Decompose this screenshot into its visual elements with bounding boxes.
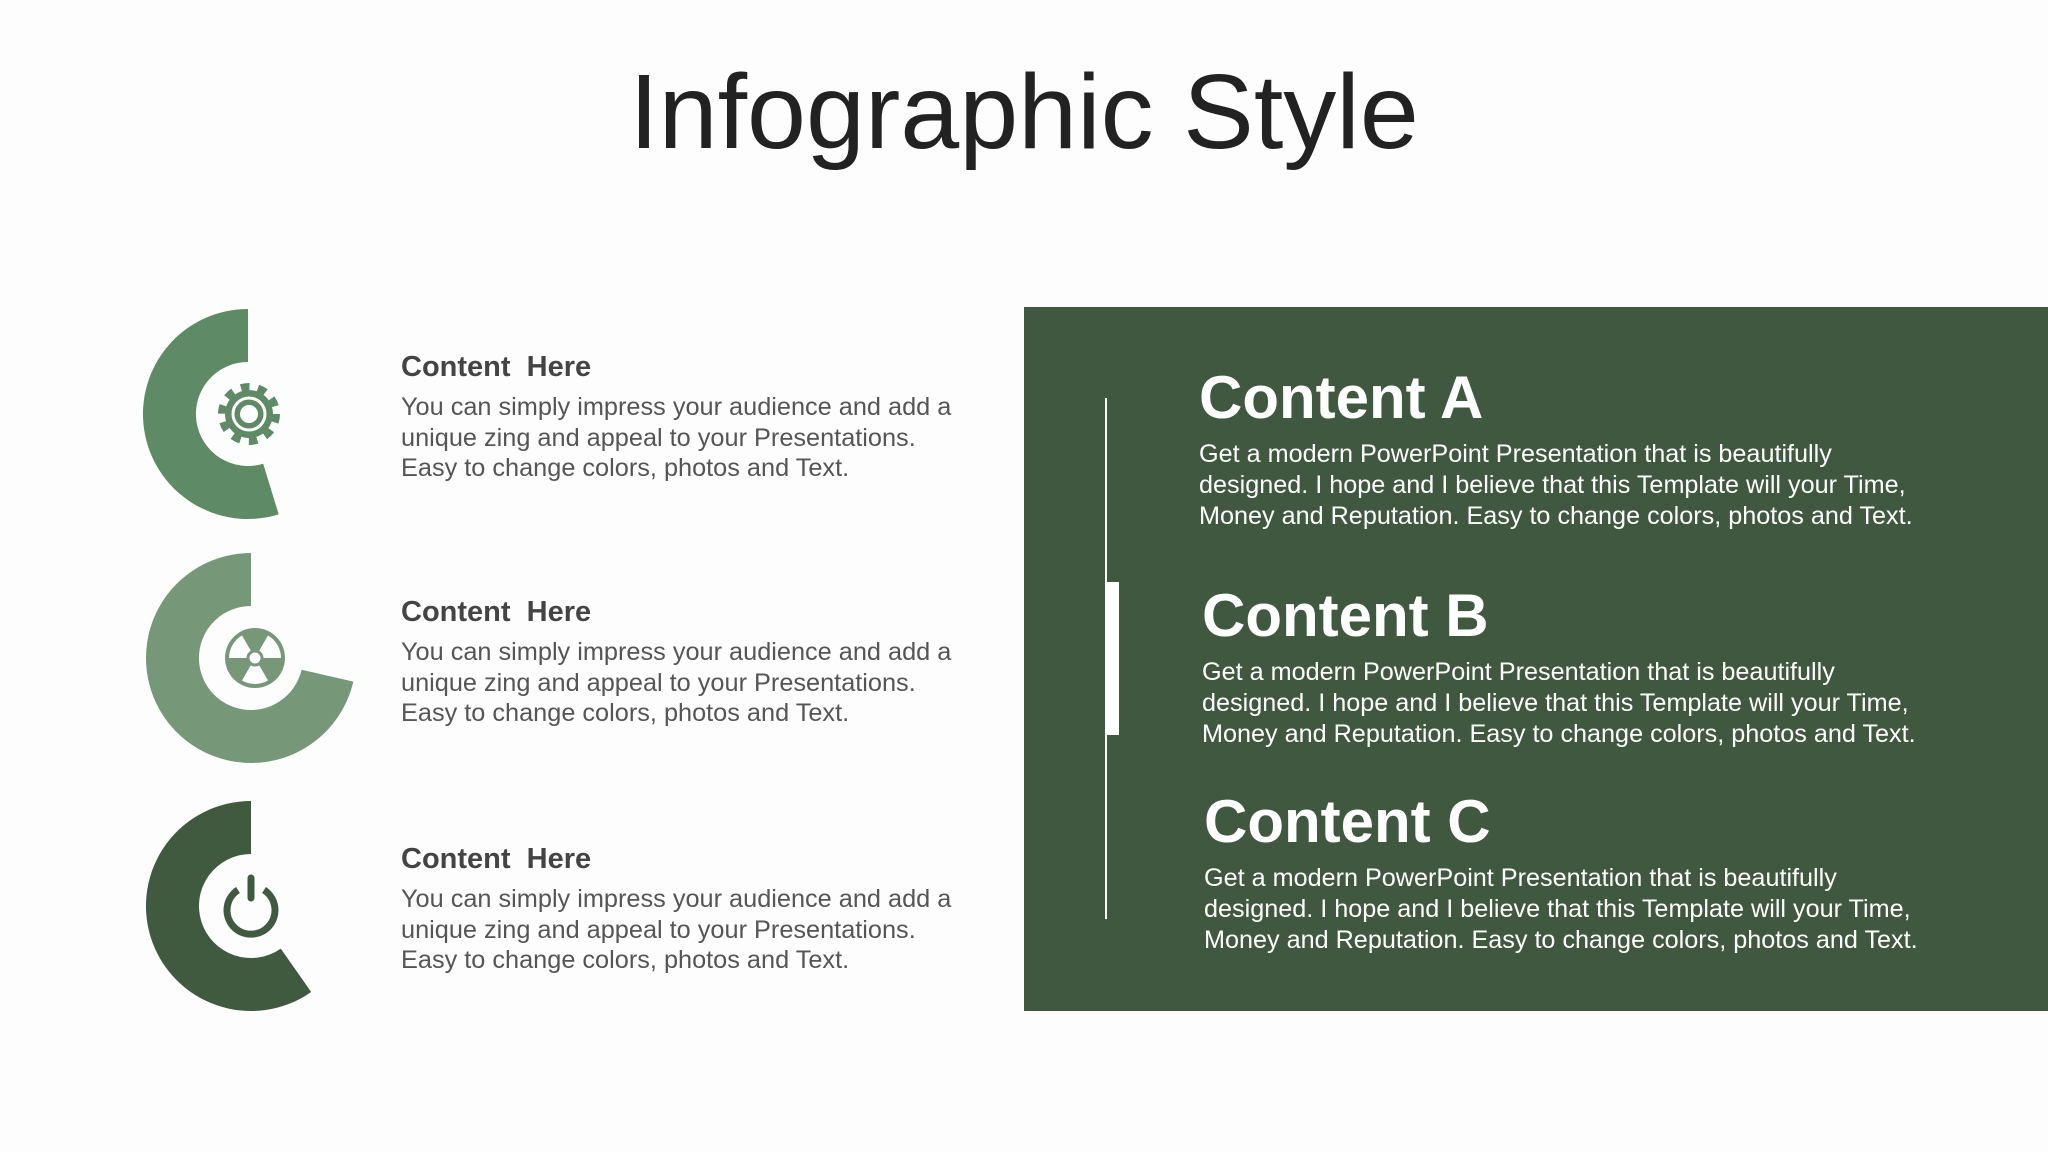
- content C: [1204, 788, 1918, 954]
- vertical line: [1105, 398, 1107, 919]
- content A: designed. I hope and I believe that this Template will your Time,: [1199, 471, 1906, 499]
- content A: Money and Reputation. Easy to change colors, photos and Text.: [1199, 502, 1913, 530]
- content A: Content A: [1199, 364, 1483, 431]
- content B: [1202, 582, 1916, 748]
- content C: Content C: [1204, 788, 1491, 855]
- text block 3: [401, 843, 952, 974]
- icon: power arc: [146, 801, 311, 1011]
- text block 3: Easy to change colors, photos and Text.: [401, 946, 849, 974]
- content B: Money and Reputation. Easy to change colors, photos and Text.: [1202, 720, 1916, 748]
- panel: green content: [1024, 307, 2048, 1011]
- text block 2: Easy to change colors, photos and Text.: [401, 699, 849, 727]
- content A: [1199, 364, 1913, 530]
- content A: Get a modern PowerPoint Presentation that is beautifully: [1199, 440, 1832, 468]
- icon: radiation arc: [146, 553, 353, 763]
- text block 1: Content Here: [401, 351, 591, 383]
- content C: Money and Reputation. Easy to change colors, photos and Text.: [1204, 926, 1918, 954]
- text block 3: You can simply impress your audience and add a: [401, 885, 951, 913]
- text block 1: [401, 351, 952, 482]
- content B: designed. I hope and I believe that this Template will your Time,: [1202, 689, 1909, 717]
- text block 1: You can simply impress your audience and add a: [401, 393, 951, 421]
- text block 1: unique zing and appeal to your Presentations.: [401, 424, 916, 452]
- text block 3: unique zing and appeal to your Presentations.: [401, 916, 916, 944]
- content B: Content B: [1202, 582, 1489, 649]
- text block 2: [401, 596, 952, 727]
- text block 1: Easy to change colors, photos and Text.: [401, 454, 849, 482]
- text block 2: unique zing and appeal to your Presentations.: [401, 669, 916, 697]
- highlight bar: [1105, 582, 1119, 735]
- text block 3: Content Here: [401, 843, 591, 875]
- title: Infographic Style: [629, 53, 1419, 171]
- content B: Get a modern PowerPoint Presentation that is beautifully: [1202, 658, 1835, 686]
- icon: gear arc: [143, 309, 279, 519]
- text block 2: You can simply impress your audience and add a: [401, 638, 951, 666]
- content C: Get a modern PowerPoint Presentation that is beautifully: [1204, 864, 1837, 892]
- content C: designed. I hope and I believe that this Template will your Time,: [1204, 895, 1911, 923]
- icons column: [142, 309, 354, 1011]
- text block 2: Content Here: [401, 596, 591, 628]
